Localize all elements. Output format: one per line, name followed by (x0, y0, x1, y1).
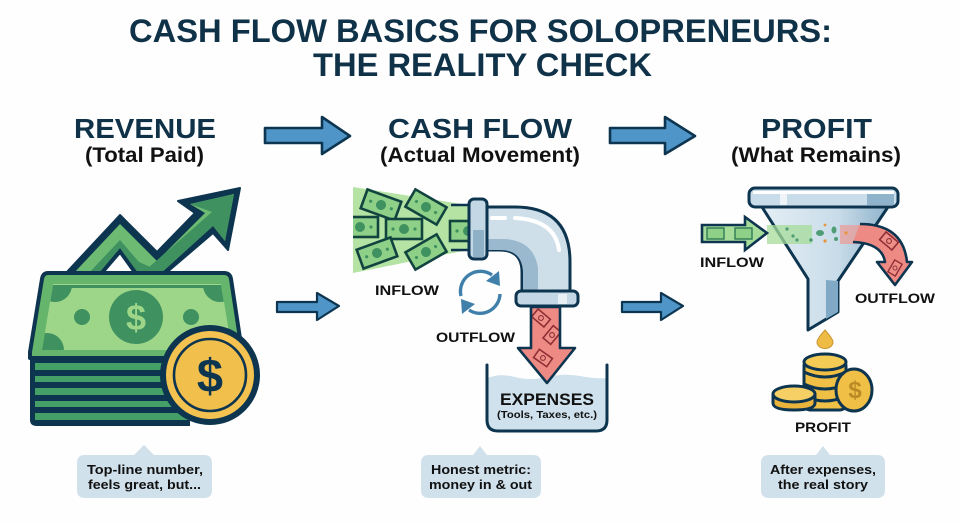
icon: expenses bucket (487, 365, 607, 431)
icon: gold coin: $ (197, 349, 223, 402)
icon: gold drop (817, 330, 833, 348)
icon: coin stacks (773, 354, 872, 411)
heading: profit (731, 113, 901, 167)
arrow: small cash flow to profit (622, 293, 683, 320)
icon: gold coin (160, 325, 260, 425)
heading: revenue (74, 113, 216, 167)
title: THE REALITY CHECK (313, 47, 652, 83)
icon: growth arrow (65, 188, 240, 274)
callout: profit: After expenses, (770, 462, 876, 477)
icon: bill stack: $ (126, 297, 146, 338)
heading: cash flow: (Actual Movement) (380, 144, 580, 167)
icon: red outflow arrow (518, 307, 575, 383)
arrow: cash flow to profit (610, 117, 695, 154)
heading: cash flow: CASH FLOW (388, 113, 573, 144)
callout: cash flow: Honest metric: (431, 462, 531, 477)
heading: profit: PROFIT (761, 113, 872, 144)
heading: revenue: (Total Paid) (85, 144, 204, 167)
label: expense examples: (Tools, Taxes, etc.) (497, 409, 597, 421)
arrow: small revenue to cash flow (277, 293, 339, 320)
icon: green band in funnel (767, 225, 812, 244)
icon: green money inflow stream (353, 187, 468, 273)
label: inflow: INFLOW (375, 282, 440, 298)
arrow: revenue to cash flow (265, 117, 350, 154)
callout: cash flow (421, 446, 541, 498)
label: expenses: EXPENSES (500, 390, 594, 409)
icon: cycle arrows (460, 271, 500, 314)
heading: profit: (What Remains) (731, 144, 901, 167)
icon: money stack with growth arrow and coin (30, 188, 260, 426)
callout: profit (761, 446, 885, 498)
label: funnel inflow: INFLOW (700, 254, 765, 270)
icon: elbow pipe (469, 199, 578, 306)
icon: bill stack (30, 268, 245, 426)
heading: cash flow (380, 113, 580, 167)
icon: funnel inflow arrow (702, 217, 767, 250)
callout: profit: the real story (778, 477, 869, 492)
icon: filtered particles (785, 224, 867, 243)
callout: revenue: Top-line number, (87, 462, 203, 477)
icon: red band in funnel (840, 225, 860, 244)
icon: coin stacks: $ (848, 377, 862, 404)
icon: funnel (749, 188, 898, 330)
icon: funnel outflow arrow (853, 224, 912, 285)
label: outflow: OUTFLOW (436, 329, 516, 345)
heading: revenue: REVENUE (74, 113, 216, 144)
callout: revenue: feels great, but... (88, 477, 201, 492)
label: funnel outflow: OUTFLOW (855, 290, 936, 306)
title (129, 13, 832, 83)
label: profit: PROFIT (795, 419, 851, 435)
title: CASH FLOW BASICS FOR SOLOPRENEURS: (129, 13, 832, 49)
callout: cash flow: money in & out (429, 477, 533, 492)
callout: revenue (77, 445, 212, 498)
